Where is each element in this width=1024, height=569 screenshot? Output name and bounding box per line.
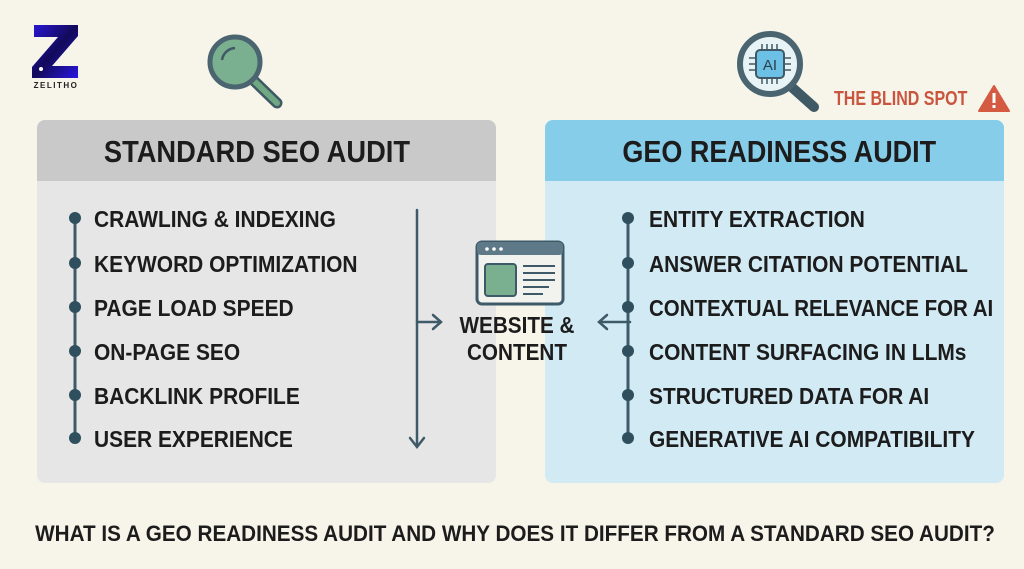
heading: standard SEO audit: STANDARD SEO AUDIT — [103, 134, 410, 169]
bottom question: WHAT IS A GEO READINESS AUDIT AND WHY DOES IT DIFFER FROM A STANDARD SEO AUDIT? — [35, 521, 995, 546]
heading: standard SEO audit — [37, 120, 496, 181]
label: website & content: WEBSITE & — [459, 312, 575, 338]
heading: GEO readiness audit — [545, 120, 1004, 181]
logo: ZELITHO — [34, 81, 78, 90]
panel: GEO readiness audit: STRUCTURED DATA FOR AI — [649, 383, 929, 409]
panel: GEO readiness audit: ENTITY EXTRACTION — [649, 206, 865, 232]
panel: standard SEO audit: BACKLINK PROFILE — [94, 383, 300, 409]
panel: standard SEO audit: KEYWORD OPTIMIZATION — [94, 251, 358, 277]
icon: magnifier — [208, 34, 282, 108]
icon: AI magnifier: AI — [763, 57, 777, 74]
panel: GEO readiness audit: CONTENT SURFACING IN LLMs — [649, 339, 966, 365]
panel: GEO readiness audit — [545, 120, 1004, 483]
label: website & content — [459, 312, 575, 365]
panel: standard SEO audit: CRAWLING & INDEXING — [94, 206, 336, 232]
panel: GEO readiness audit: ANSWER CITATION POTENTIAL — [649, 251, 968, 277]
panel: standard SEO audit: ON-PAGE SEO — [94, 339, 240, 365]
callout: the blind spot — [834, 85, 1010, 112]
panel: GEO readiness audit: GENERATIVE AI COMPATIBILITY — [649, 426, 975, 452]
icon: website — [476, 240, 564, 306]
arrow: right flow — [597, 314, 632, 330]
callout: the blind spot: THE BLIND SPOT — [834, 88, 967, 110]
panel: standard SEO audit: USER EXPERIENCE — [94, 426, 293, 452]
panel: standard SEO audit: PAGE LOAD SPEED — [94, 295, 294, 321]
label: website & content: CONTENT — [467, 339, 567, 365]
panel: GEO readiness audit: CONTEXTUAL RELEVANCE FOR AI — [649, 295, 993, 321]
heading: GEO readiness audit: GEO READINESS AUDIT — [623, 134, 936, 169]
timeline left — [69, 212, 81, 444]
timeline right — [622, 212, 634, 444]
panel: standard SEO audit — [37, 120, 496, 483]
icon: AI magnifier — [737, 31, 819, 112]
arrow: left flow — [408, 208, 443, 449]
logo — [32, 25, 78, 90]
